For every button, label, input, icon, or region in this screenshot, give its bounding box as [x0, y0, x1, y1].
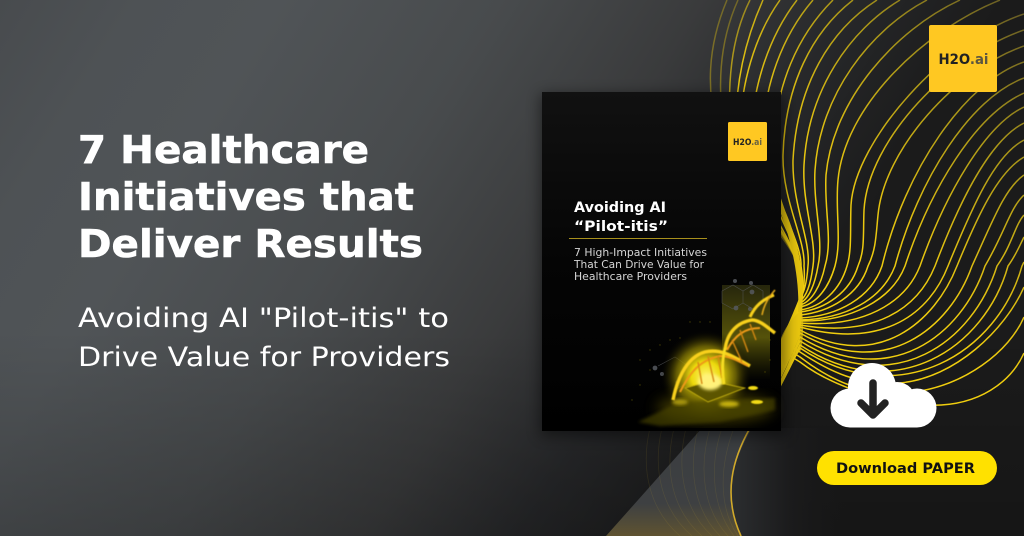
main logo — [929, 25, 997, 92]
cover subtitle: 7 High-Impact Initiatives — [574, 247, 707, 259]
subtitle: Drive Value for Providers — [78, 342, 450, 373]
cover title: “Pilot-itis” — [574, 219, 668, 235]
cover subtitle: Healthcare Providers — [574, 271, 687, 283]
flowing gold lines — [710, 0, 1024, 405]
main logo: H2O.ai — [938, 52, 988, 68]
cover subtitle: That Can Drive Value for — [573, 259, 705, 271]
download button: Download PAPER — [836, 461, 975, 477]
subtitle — [78, 303, 450, 373]
download button — [817, 451, 997, 485]
cover subtitle — [573, 247, 707, 283]
cover illustration: DNA on chip — [631, 279, 775, 426]
cover title: Avoiding AI — [574, 200, 666, 216]
icon: cloud download — [830, 363, 936, 428]
book shadow — [540, 94, 786, 436]
cover logo — [728, 122, 767, 161]
thick gold convergence band — [781, 203, 803, 366]
gold curve — [731, 428, 750, 536]
book cover — [542, 92, 781, 431]
grey wedge with gold fade — [606, 428, 752, 536]
title: 7 Healthcare — [78, 128, 369, 172]
title: Initiatives that — [78, 175, 414, 219]
dark shape right of gold curve — [730, 428, 850, 536]
cover logo: H2O.ai — [733, 138, 762, 148]
cover title — [574, 200, 668, 235]
title: Deliver Results — [78, 222, 423, 266]
fine stripes in wedge — [646, 428, 738, 536]
title — [78, 128, 423, 266]
subtitle: Avoiding AI "Pilot-itis" to — [78, 303, 449, 334]
